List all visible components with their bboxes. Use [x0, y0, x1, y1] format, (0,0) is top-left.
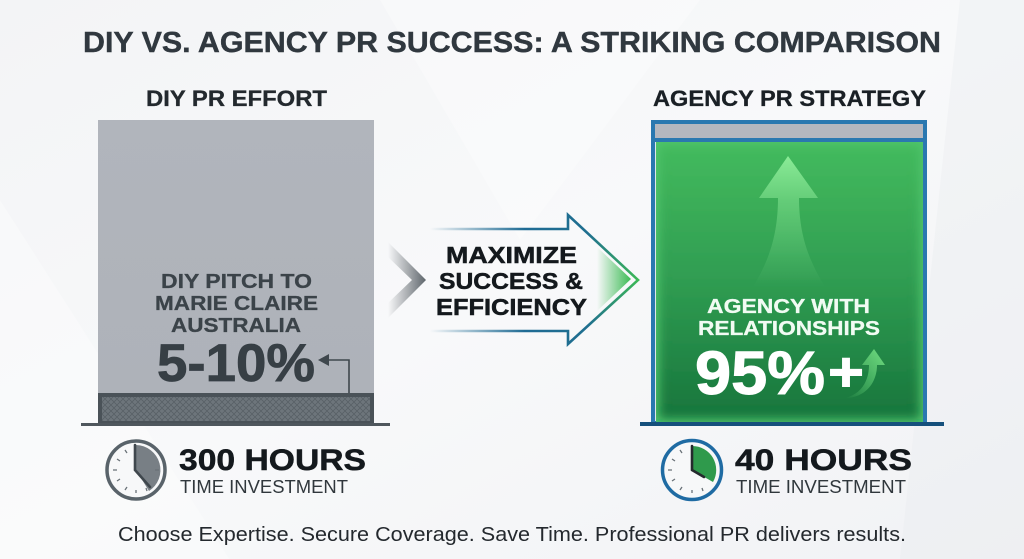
agency percentage: 95%	[695, 339, 825, 407]
hatched base	[100, 395, 372, 423]
agency label: AGENCY WITH	[707, 295, 870, 318]
upward arrow	[753, 156, 825, 287]
small curved arrow	[845, 349, 885, 398]
title: DIY VS. AGENCY PR SUCCESS: A STRIKING COMPARISON	[83, 27, 941, 59]
arrow green tip	[597, 247, 631, 311]
center arrow	[430, 215, 638, 344]
agency label	[698, 295, 880, 340]
arrow label: MAXIMIZE	[446, 242, 577, 268]
DIY time text: TIME INVESTMENT	[180, 477, 348, 497]
icon: gray clock	[107, 441, 165, 499]
ground line	[640, 422, 944, 426]
panel: DIY column	[81, 120, 390, 426]
agency label: RELATIONSHIPS	[698, 317, 880, 340]
blue frame	[653, 122, 925, 423]
footer tagline: Choose Expertise. Secure Coverage. Save Time. Professional PR delivers results.	[118, 524, 906, 546]
heading: DIY PR effort: DIY PR EFFORT	[146, 86, 328, 111]
DIY time text: 300 HOURS	[179, 444, 366, 477]
DIY percentage: 5-10%	[157, 334, 315, 393]
arrow label	[436, 242, 587, 320]
arrow outline	[430, 215, 638, 344]
heading: agency PR strategy: AGENCY PR STRATEGY	[653, 86, 926, 111]
agency percentage: +	[828, 340, 864, 403]
arrow label: EFFICIENCY	[436, 294, 587, 320]
gray remaining strip	[655, 124, 923, 138]
green fill	[656, 142, 923, 422]
agency time text	[735, 444, 912, 497]
icon: green clock	[662, 440, 722, 500]
DIY pitch label: AUSTRALIA	[171, 314, 301, 337]
frame divider	[653, 138, 925, 142]
arrow label: SUCCESS &	[439, 268, 583, 294]
gray column	[98, 120, 374, 394]
agency time text: TIME INVESTMENT	[736, 477, 906, 497]
DIY pitch label: DIY PITCH TO	[161, 270, 312, 293]
DIY pitch label: MARIE CLAIRE	[155, 292, 318, 315]
small arrow to percentage	[318, 354, 349, 393]
ground line	[81, 423, 390, 426]
icon: gray chevron	[388, 242, 426, 318]
DIY pitch label	[155, 270, 318, 337]
agency time text: 40 HOURS	[735, 444, 912, 477]
panel: agency column	[640, 122, 944, 426]
DIY time text	[179, 444, 366, 497]
